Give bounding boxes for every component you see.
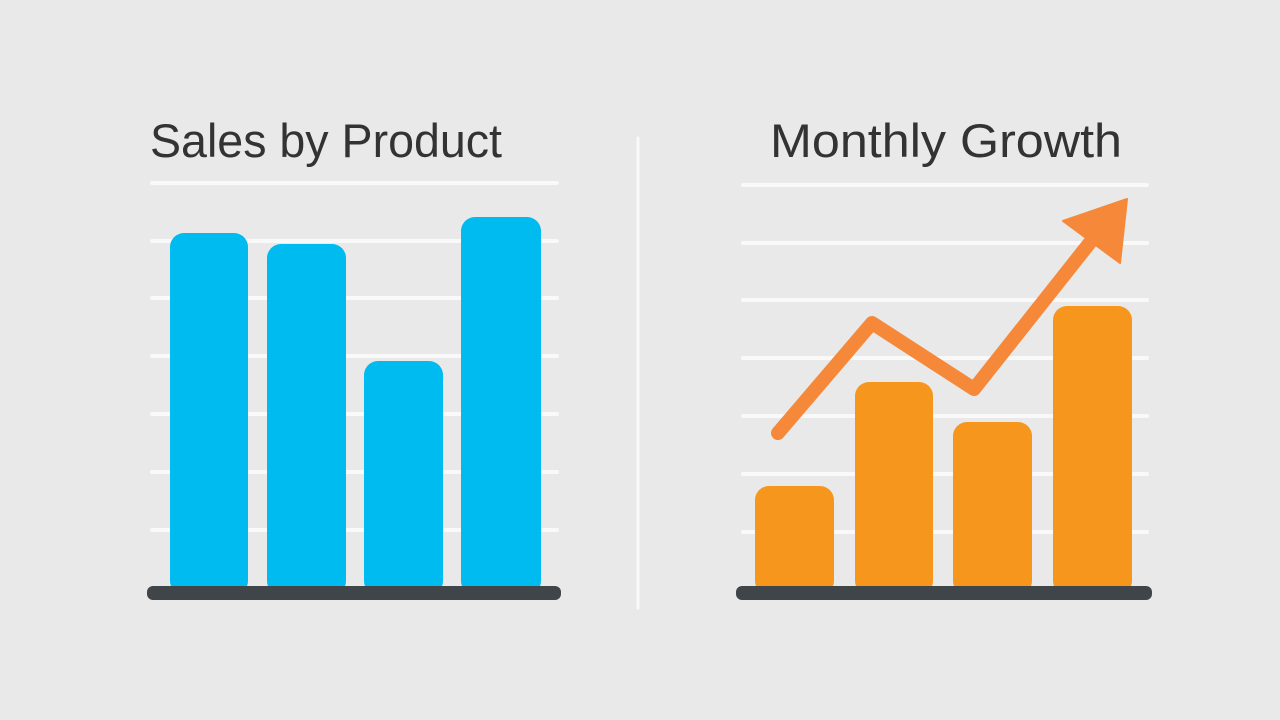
arrow: growth trend [778,199,1127,433]
title: Sales by Product: Sales by Product [150,114,502,167]
axis baseline left [147,586,561,600]
axis baseline right [736,586,1152,600]
title: Monthly Growth: Monthly Growth [770,114,1122,167]
bar chart: monthly growth [755,306,1132,595]
bar chart: sales by product [170,217,541,595]
